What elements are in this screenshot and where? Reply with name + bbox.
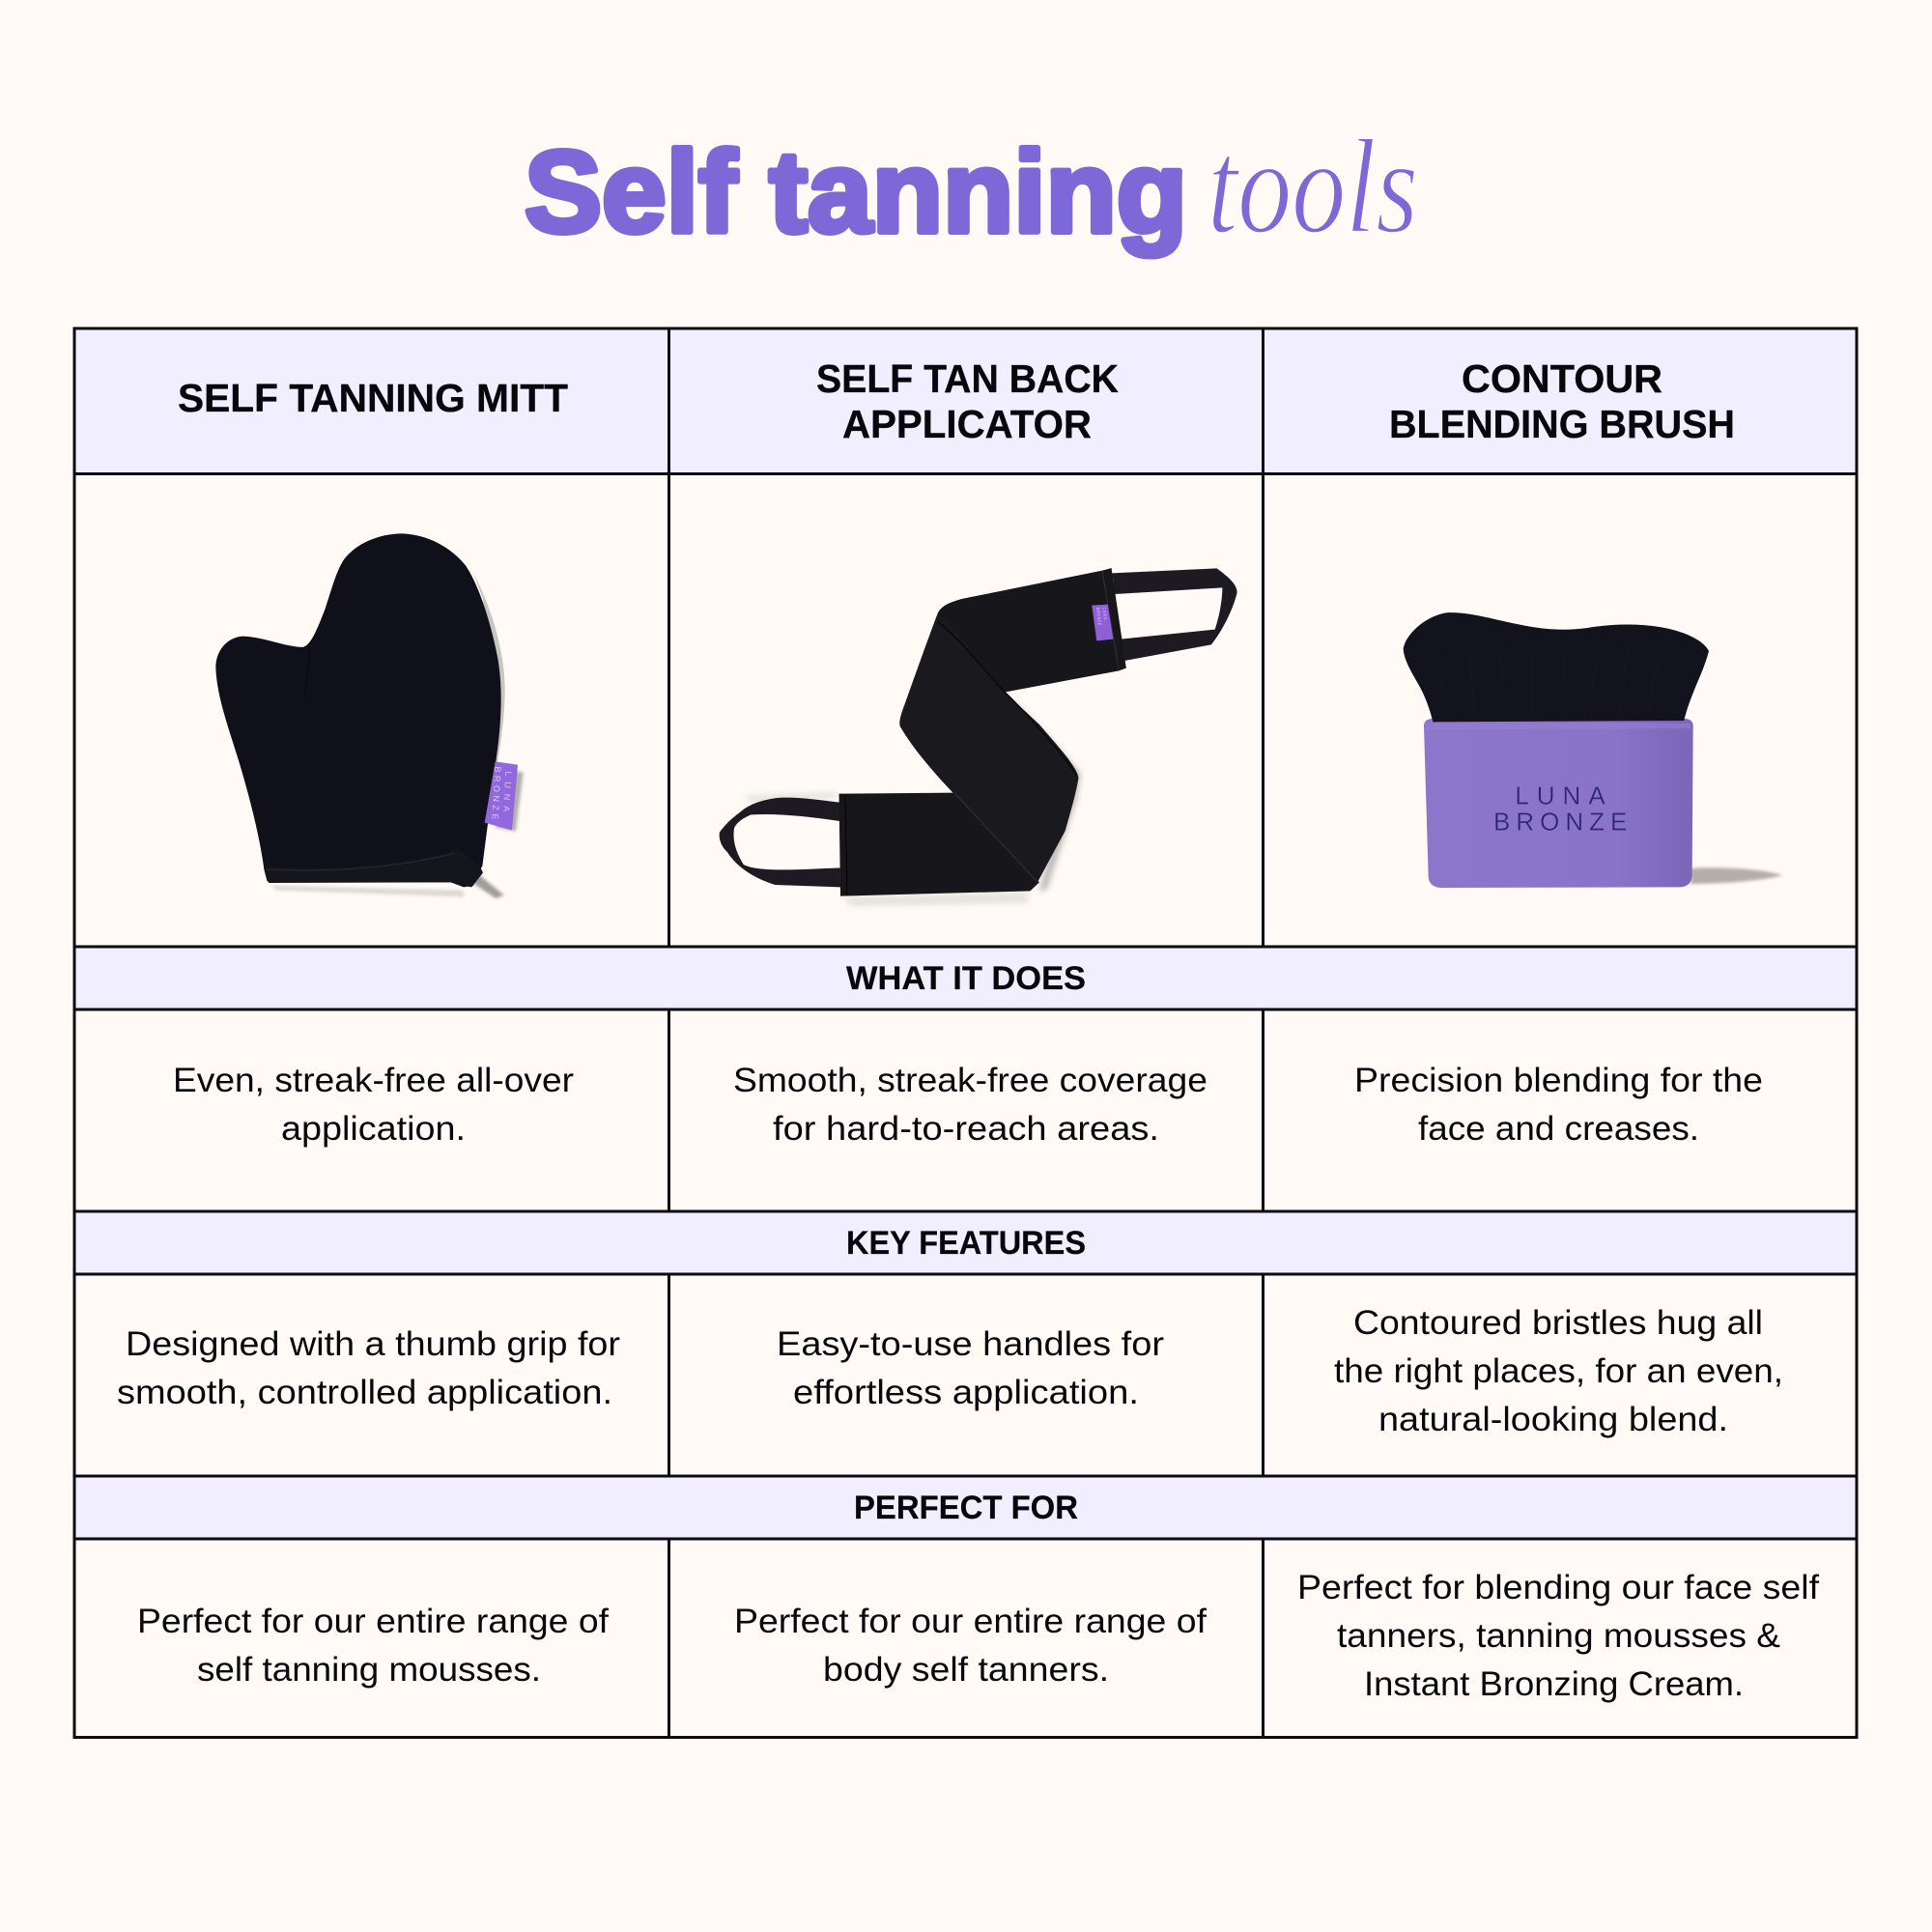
- column heading: contour brush: CONTOUR: [1462, 356, 1662, 401]
- image: contour blending brush: [1404, 612, 1782, 888]
- upper loop: [1112, 568, 1237, 661]
- brush bristles: [1404, 612, 1709, 722]
- upper band: [938, 568, 1126, 693]
- cell: mitt what it does: Even, streak-free all-over: [173, 1062, 574, 1099]
- band: what it does: [74, 947, 1857, 1009]
- title: [525, 112, 1418, 262]
- cell: brush key features: the right places, for an even,: [1334, 1352, 1783, 1390]
- icon: strap tag: LUNA: [1101, 608, 1108, 621]
- column heading: back applicator: APPLICATOR: [842, 402, 1092, 446]
- title: tools: [1208, 112, 1418, 262]
- comparison table: [74, 328, 1857, 1738]
- column heading: self tanning mitt: SELF TANNING MITT: [178, 376, 568, 420]
- cell: mitt perfect for: [137, 1603, 609, 1689]
- cell: brush what it does: [1354, 1062, 1763, 1148]
- cell: brush what it does: face and creases.: [1418, 1110, 1699, 1148]
- cell: strap perfect for: body self tanners.: [823, 1651, 1109, 1689]
- header band: [74, 328, 1857, 473]
- column heading: contour brush: [1389, 356, 1735, 446]
- cell: mitt key features: smooth, controlled application.: [117, 1374, 612, 1411]
- cell: brush key features: natural-looking blend.: [1378, 1401, 1728, 1438]
- cell: mitt key features: Designed with a thumb grip for: [126, 1325, 620, 1363]
- cell: strap key features: effortless application.: [793, 1374, 1139, 1411]
- brush logo: [1493, 781, 1627, 836]
- table grid: [74, 328, 1857, 1738]
- cell: mitt perfect for: self tanning mousses.: [197, 1651, 541, 1689]
- cell: strap perfect for: [734, 1603, 1207, 1689]
- section heading: what it does: WHAT IT DOES: [846, 960, 1086, 997]
- section heading: key features: KEY FEATURES: [846, 1225, 1086, 1262]
- cell: mitt key features: [117, 1325, 620, 1411]
- column heading: back applicator: [816, 356, 1119, 446]
- cell: strap what it does: [733, 1062, 1208, 1148]
- cell: brush perfect for: Perfect for blending our face self: [1297, 1569, 1819, 1606]
- band: key features: [74, 1211, 1857, 1274]
- cell: mitt what it does: application.: [281, 1110, 466, 1148]
- image: self tanning mitt: [215, 533, 524, 898]
- column heading: contour brush: BLENDING BRUSH: [1389, 402, 1735, 446]
- cell: brush perfect for: [1297, 1569, 1819, 1703]
- lower band: [838, 793, 1039, 896]
- cell: strap key features: Easy-to-use handles for: [777, 1325, 1164, 1363]
- brush logo: BRONZE: [1493, 807, 1627, 836]
- cell: brush perfect for: tanners, tanning mousses &: [1337, 1617, 1780, 1655]
- icon: strap tag: BRONZE: [1095, 608, 1103, 626]
- column heading: back applicator: SELF TAN BACK: [816, 356, 1119, 401]
- icon: strap tag: [1092, 605, 1113, 640]
- icon: mitt tag: BRONZE: [490, 766, 502, 820]
- cell: strap what it does: for hard-to-reach areas.: [773, 1110, 1159, 1148]
- cell: mitt what it does: [173, 1062, 574, 1148]
- brush handle: [1424, 719, 1693, 888]
- cell: mitt perfect for: Perfect for our entire range of: [137, 1603, 609, 1640]
- image: back applicator strap: [720, 568, 1237, 906]
- band: perfect for: [74, 1476, 1857, 1539]
- title: Self tanning: [525, 128, 1187, 257]
- icon: mitt tag: LUNA: [501, 771, 513, 811]
- cell: brush key features: [1334, 1304, 1783, 1438]
- icon: mitt tag: [485, 761, 518, 830]
- cell: strap perfect for: Perfect for our entire range of: [734, 1603, 1207, 1640]
- cell: strap key features: [777, 1325, 1164, 1411]
- cell: strap what it does: Smooth, streak-free coverage: [733, 1062, 1208, 1099]
- cell: brush perfect for: Instant Bronzing Cream.: [1364, 1665, 1744, 1703]
- cell: brush what it does: Precision blending for the: [1354, 1062, 1763, 1099]
- section heading: perfect for: PERFECT FOR: [854, 1490, 1078, 1526]
- brush logo: LUNA: [1515, 781, 1605, 810]
- cell: brush key features: Contoured bristles hug all: [1353, 1304, 1763, 1342]
- lower loop: [720, 798, 840, 887]
- middle fold: [899, 613, 1078, 882]
- brush shadow: [1690, 867, 1782, 884]
